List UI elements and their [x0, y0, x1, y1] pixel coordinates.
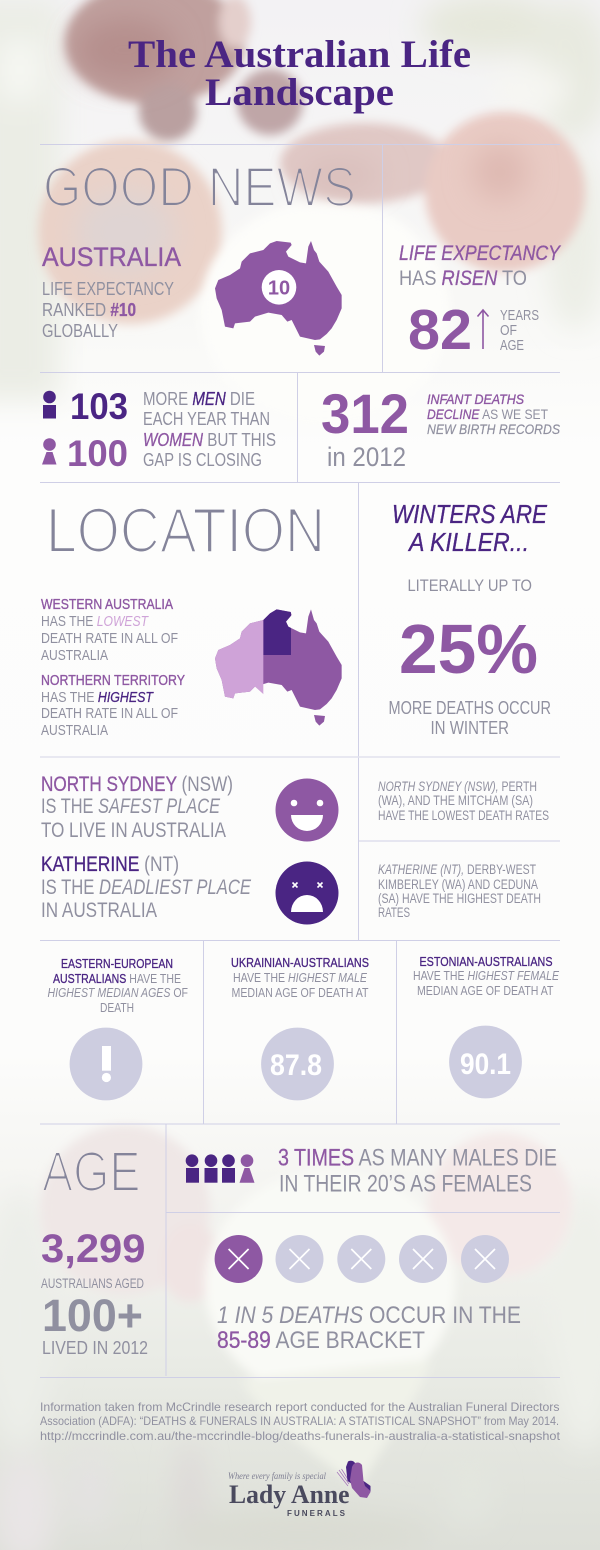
- text: death rates by state: HAS THE LOWEST: [41, 613, 149, 630]
- text: death rates by state: AUSTRALIA: [41, 647, 108, 664]
- text: source footnote: Information taken from McCrindle research report conducted for the Australian Funeral Directors: [40, 1400, 560, 1414]
- stat: 103 men to 100 women: 103: [70, 386, 128, 427]
- text: life expectancy risen: LIFE EXPECTANCY: [399, 241, 561, 265]
- text: safest place: IS THE SAFEST PLACE: [41, 794, 220, 818]
- text: lowest death rates: [378, 779, 549, 823]
- stat circle: 87.8: 87.8: [270, 1049, 322, 1082]
- text: ukrainian-australians: UKRAINIAN-AUSTRALIANS: [231, 955, 369, 970]
- text: death rates by state: HAS THE HIGHEST: [41, 689, 155, 706]
- callout: winters are a killer: WINTERS ARE: [392, 499, 548, 529]
- text: life expectancy risen: HAS RISEN TO: [399, 266, 527, 290]
- text: death rates by state: [41, 596, 185, 739]
- callout: winters are a killer: A KILLER...: [407, 527, 529, 557]
- icon: man: [43, 391, 56, 418]
- icon: happy face: [276, 778, 338, 842]
- stat: 103 men to 100 women: 100: [67, 433, 128, 474]
- text: safest place: TO LIVE IN AUSTRALIA: [41, 818, 227, 842]
- text: ukrainian-australians: [231, 955, 369, 1000]
- stat: 3,299 aged 100+: LIVED IN 2012: [42, 1338, 148, 1358]
- logo: Lady Anne Funerals: [228, 1461, 370, 1518]
- text: death rates by state: NORTHERN TERRITORY: [41, 672, 185, 689]
- stat: 3,299 aged 100+: 100+: [42, 1290, 143, 1341]
- text: deadliest place: KATHERINE (NT): [41, 852, 179, 876]
- text: 1 in 5 deaths: 1 IN 5 DEATHS OCCUR IN THE: [217, 1302, 521, 1329]
- text: safest place: [41, 772, 233, 842]
- text: source footnote: Association (ADFA): “DEATHS & FUNERALS IN AUSTRALIA: A STATISTICAL SNAPSHOT” from May 2014.: [40, 1414, 559, 1428]
- stat: 312 infant deaths: 312: [321, 382, 409, 445]
- arrow: rising: [478, 310, 488, 349]
- text: eastern-european australians: HIGHEST MEDIAN AGES OF: [48, 985, 188, 1000]
- panel: location: [41, 496, 551, 924]
- icons: one in five crosses: [215, 1235, 509, 1283]
- stat: 312 infant deaths: in 2012: [327, 442, 406, 472]
- icons: three men one woman: [186, 1154, 254, 1183]
- icon: woman: [42, 438, 56, 464]
- text: gap is closing: GAP IS CLOSING: [143, 450, 262, 470]
- lower flowers: [40, 1125, 210, 1295]
- white rose: [200, 200, 450, 424]
- text: death rates by state: DEATH RATE IN ALL OF: [41, 630, 178, 647]
- text: estonian-australians: [413, 954, 559, 998]
- map: Australia by state death rate: [215, 609, 342, 726]
- text: deadliest place: IN AUSTRALIA: [41, 898, 158, 922]
- heading: good news: GOOD NEWS: [43, 156, 356, 219]
- title: The Australian Life: [128, 33, 471, 76]
- text: highest death rates: KIMBERLEY (WA) AND CEDUNA: [378, 877, 538, 892]
- text: ukrainian-australians: HAVE THE HIGHEST MALE: [233, 970, 367, 985]
- callout: winters are a killer: LITERALLY UP TO: [408, 576, 532, 595]
- callout: winters are a killer: 25%: [399, 610, 538, 688]
- text: lowest death rates: NORTH SYDNEY (NSW), PERTH: [378, 779, 537, 794]
- text: eastern-european australians: AUSTRALIANS HAVE THE: [53, 971, 181, 986]
- text: gap is closing: [143, 389, 276, 470]
- icon: dead face: [276, 862, 338, 924]
- text: ukrainian-australians: MEDIAN AGE OF DEATH AT: [232, 985, 369, 1000]
- icon: exclamation circle: [70, 1028, 142, 1100]
- stat circle: 90.1: 90.1: [460, 1048, 511, 1081]
- panel: median ages: [48, 954, 559, 1100]
- heading: location: LOCATION: [46, 496, 325, 566]
- stat: 312 infant deaths: NEW BIRTH RECORDS: [427, 421, 561, 437]
- text: Australia ranked 10: RANKED #10: [42, 299, 136, 320]
- text: Australia ranked 10: AUSTRALIA: [42, 242, 181, 272]
- text: highest death rates: KATHERINE (NT), DERBY-WEST: [378, 862, 536, 877]
- callout: winters are a killer: IN WINTER: [430, 718, 509, 738]
- text: Australia ranked 10: [42, 242, 181, 341]
- text: 1 in 5 deaths: [217, 1302, 521, 1354]
- stat: 82 years of age: YEARS: [500, 308, 539, 324]
- text: highest death rates: (SA) HAVE THE HIGHEST DEATH: [378, 891, 541, 906]
- text: estonian-australians: MEDIAN AGE OF DEATH AT: [417, 983, 554, 998]
- heading: age: AGE: [42, 1140, 140, 1204]
- text: Australia ranked 10: LIFE EXPECTANCY: [42, 278, 174, 299]
- stat: 312 infant deaths: DECLINE AS WE SET: [427, 406, 548, 422]
- text: lowest death rates: (WA), AND THE MITCHAM (SA): [378, 793, 533, 808]
- icon: butterfly: [337, 1461, 370, 1498]
- stat: 3,299 aged 100+: AUSTRALIANS AGED: [41, 1276, 144, 1291]
- text: life expectancy risen: [399, 241, 561, 290]
- callout: winters are a killer: MORE DEATHS OCCUR: [388, 698, 551, 718]
- text: deadliest place: [41, 852, 252, 922]
- stat: 312 infant deaths: INFANT DEATHS: [427, 391, 525, 407]
- text: highest death rates: RATES: [378, 905, 410, 920]
- text: eastern-european australians: DEATH: [100, 1000, 134, 1015]
- text: 1 in 5 deaths: 85-89 AGE BRACKET: [217, 1327, 425, 1354]
- text: estonian-australians: ESTONIAN-AUSTRALIANS: [420, 954, 553, 969]
- logo: Lady Anne Funerals: Where every family is special: [228, 1471, 326, 1482]
- text: gap is closing: MORE MEN DIE: [143, 389, 255, 409]
- map: Australia with rank 10: [215, 241, 342, 356]
- panel: good news: [42, 156, 561, 474]
- text: death rates by state: WESTERN AUSTRALIA: [41, 596, 173, 613]
- text: eastern-european australians: [48, 956, 188, 1015]
- text: highest death rates: [378, 862, 541, 920]
- callout: winters are a killer: [388, 499, 551, 738]
- stat: 82 years of age: OF: [500, 323, 517, 339]
- stat: 82 years of age: [408, 298, 539, 362]
- stat circle: 87.8: [261, 1028, 334, 1100]
- top dark flower: [65, 0, 245, 104]
- stat: 3,299 aged 100+: [41, 1227, 148, 1358]
- text: gap is closing: EACH YEAR THAN: [143, 409, 270, 429]
- stat: 82 years of age: AGE: [500, 338, 524, 354]
- text: source footnote: http://mccrindle.com.au/the-mccrindle-blog/deaths-funerals-in-australia-a-statistical-snapshot: [40, 1429, 561, 1443]
- text: safest place: NORTH SYDNEY (NSW): [41, 772, 233, 796]
- text: source footnote: [40, 1400, 561, 1443]
- logo: Lady Anne Funerals: Lady Anne: [229, 1480, 350, 1509]
- text: death rates by state: DEATH RATE IN ALL OF: [41, 705, 178, 722]
- title: Landscape: [205, 71, 394, 114]
- text: death rates by state: AUSTRALIA: [41, 722, 108, 739]
- stat: 82 years of age: 82: [408, 298, 472, 362]
- stat: 3,299 aged 100+: 3,299: [41, 1227, 146, 1271]
- panel: age: [41, 1140, 557, 1358]
- text: 3 times as many males: [278, 1145, 557, 1198]
- text: estonian-australians: HAVE THE HIGHEST FEMALE: [413, 968, 559, 983]
- right flower: [280, 123, 450, 203]
- title: [128, 33, 471, 114]
- lower white rose: [205, 1170, 455, 1400]
- map: Australia with rank 10: 10: [268, 278, 290, 300]
- stat circle: 90.1: [449, 1026, 522, 1098]
- text: 3 times as many males: IN THEIR 20’S AS FEMALES: [279, 1171, 532, 1198]
- text: lowest death rates: HAVE THE LOWEST DEATH RATES: [378, 808, 549, 823]
- left flower: [38, 140, 222, 324]
- text: 3 times as many males: 3 TIMES AS MANY MALES DIE: [278, 1145, 557, 1172]
- text: Australia ranked 10: GLOBALLY: [42, 320, 118, 341]
- stat: 312 infant deaths: [321, 382, 561, 472]
- text: gap is closing: WOMEN BUT THIS: [143, 430, 276, 450]
- stat: 103 men to 100 women: [42, 386, 276, 474]
- logo: Lady Anne Funerals: FUNERALS: [287, 1509, 346, 1518]
- text: eastern-european australians: EASTERN-EUROPEAN: [61, 956, 173, 971]
- text: deadliest place: IS THE DEADLIEST PLACE: [41, 875, 252, 899]
